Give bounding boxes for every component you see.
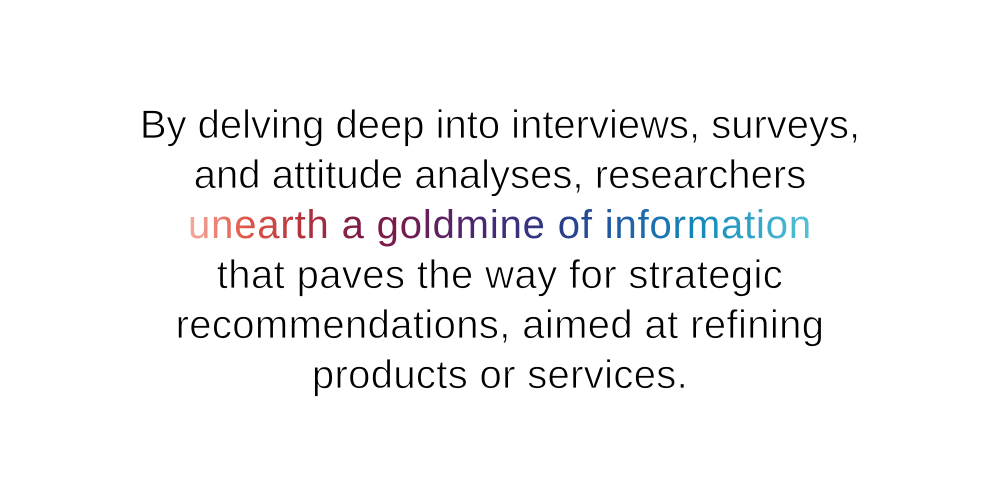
text block: main statement	[140, 103, 860, 397]
text line 1: By delving deep into interviews, surveys,	[140, 103, 860, 147]
text line 2: and attitude analyses, researchers	[194, 153, 806, 197]
text line 5: recommendations, aimed at refining	[176, 303, 824, 347]
highlighted gradient text line: unearth a goldmine of information	[188, 203, 812, 247]
text line 4: that paves the way for strategic	[217, 253, 783, 297]
text line 6: products or services.	[312, 353, 688, 397]
